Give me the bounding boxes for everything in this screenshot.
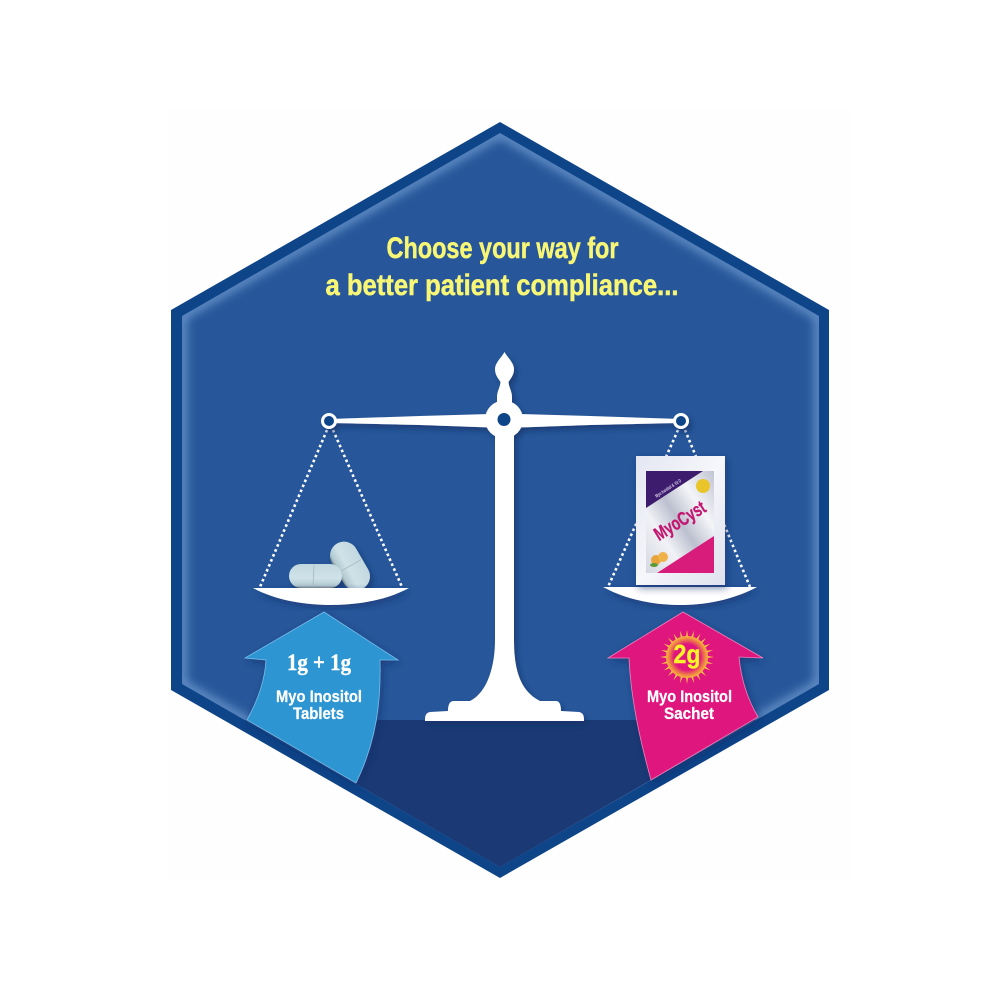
hexagon inner panel <box>170 120 830 880</box>
hexagon frame <box>171 122 829 878</box>
tablet: angled <box>325 536 375 596</box>
arrow label <box>276 687 362 723</box>
dose label: 2g <box>674 639 700 669</box>
left pan strings <box>260 430 402 587</box>
arrow label <box>647 687 732 723</box>
blue arrow <box>245 612 398 783</box>
sachet small text: Myo Inositol & Vit D <box>654 478 683 500</box>
left pan <box>253 588 409 605</box>
tablets <box>289 536 375 596</box>
MyoCyst sachet <box>636 456 725 585</box>
scale pivot <box>498 413 510 426</box>
brand name: MyoCyst <box>651 497 710 545</box>
infographic: hexagon scale comparison <box>171 122 829 878</box>
heading <box>326 232 678 302</box>
orange fruit <box>650 552 668 567</box>
tablet: flat <box>289 564 342 588</box>
heading: Choose your way for <box>386 232 619 265</box>
dose starburst <box>660 630 714 684</box>
faint background panel <box>168 110 852 880</box>
dose label: 1g + 1g <box>287 650 351 675</box>
pink arrow <box>608 612 763 780</box>
dark floor <box>245 720 755 867</box>
right pan strings <box>608 430 750 587</box>
heading: a better patient compliance... <box>326 269 678 302</box>
arrow label: Myo Inositol <box>647 687 732 706</box>
arrow label: Tablets <box>293 704 344 723</box>
sugar free badge <box>696 479 710 493</box>
purple band <box>646 471 703 508</box>
arrow label: Sachet <box>664 704 714 723</box>
pink band <box>657 536 714 573</box>
left beam ring <box>324 416 334 426</box>
right pan <box>603 587 757 605</box>
arrow label: Myo Inositol <box>276 687 362 706</box>
balance scale stand and beam <box>321 352 689 721</box>
sachet label <box>646 471 714 573</box>
right beam ring <box>676 416 686 426</box>
